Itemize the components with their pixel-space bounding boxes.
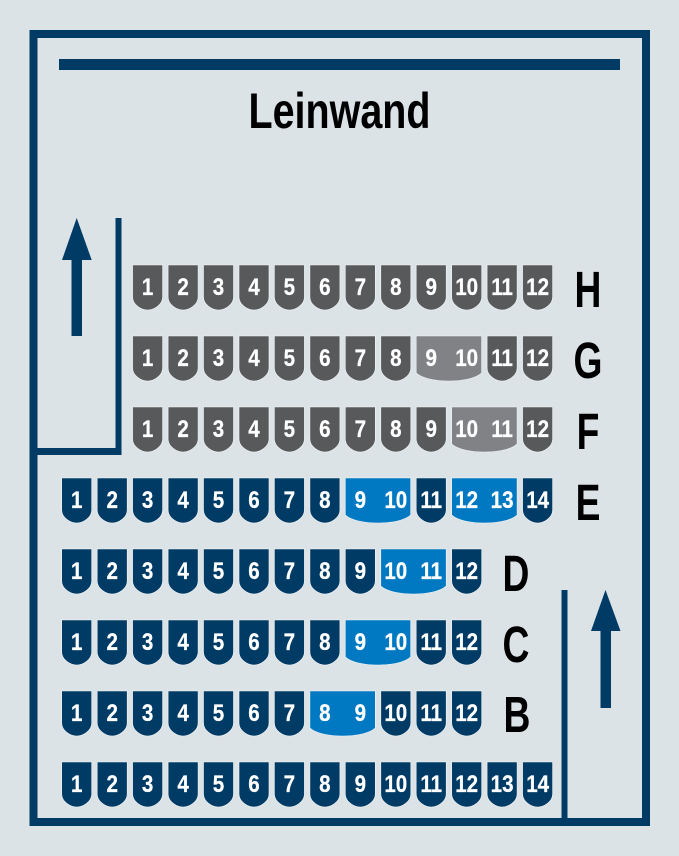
row H seats [133,265,553,310]
row H seats: 6 [319,273,331,300]
row A seats: 7 [284,770,295,797]
row E seats: 1 [71,486,82,513]
row G seats: 12 [526,344,549,371]
row C seats: 6 [248,628,260,655]
row C seats: 2 [106,628,118,655]
row E seats [62,478,553,523]
row F seats: 5 [284,415,295,442]
row H seats: 3 [213,273,224,300]
row D seats: 10 [384,557,407,584]
row B seats: 7 [284,699,295,726]
row H seats: 1 [142,273,153,300]
row D seats: 12 [455,557,478,584]
row label E: E [576,475,600,531]
row G seats: 2 [177,344,189,371]
row E seats: 8 [319,486,331,513]
row C seats: 4 [177,628,189,655]
row D seats: 11 [420,557,442,584]
row A seats: 13 [491,770,514,797]
row D seats: 8 [319,557,331,584]
row label F: F [577,404,599,460]
left aisle wall [37,218,122,455]
row E seats: 14 [526,486,549,513]
row A seats: 12 [455,770,478,797]
row A seats: 10 [384,770,407,797]
row F seats: 12 [526,415,549,442]
row A seats: 6 [248,770,260,797]
row C seats: 8 [319,628,331,655]
title: Leinwand [248,83,430,139]
row E seats: 12 [455,486,478,513]
row E seats: 10 [384,486,407,513]
row A seats: 9 [355,770,366,797]
row B seats: 8 [319,699,331,726]
row H seats: 8 [390,273,402,300]
row E seats: 7 [284,486,295,513]
row A seats: 3 [142,770,153,797]
row B seats: 3 [142,699,153,726]
row E seats: 11 [420,486,442,513]
row A seats: 1 [71,770,82,797]
row H seats: 4 [248,273,260,300]
row C seats: 1 [71,628,82,655]
row G seats: 11 [491,344,513,371]
row label B: B [504,687,530,743]
row A seats: 4 [177,770,189,797]
row C seats: 12 [455,628,478,655]
row H seats: 2 [177,273,189,300]
row B seats: 5 [213,699,224,726]
row C seats: 7 [284,628,295,655]
row B seats: 11 [420,699,442,726]
row D seats: 7 [284,557,295,584]
row C seats: 10 [384,628,407,655]
row A seats: 14 [526,770,549,797]
row E seats: 5 [213,486,224,513]
row A seats: 5 [213,770,224,797]
row A seats: 2 [106,770,118,797]
row C seats [62,620,482,665]
row F seats: 7 [355,415,366,442]
row D seats: 2 [106,557,118,584]
row label C: C [503,617,529,673]
row D seats [62,549,482,594]
row G seats: 8 [390,344,402,371]
row D seats: 5 [213,557,224,584]
row D seats: 1 [71,557,82,584]
row E seats: 3 [142,486,153,513]
row D seats: 6 [248,557,260,584]
row A seats: 8 [319,770,331,797]
arrow: left aisle up [62,218,92,336]
row C seats: 11 [420,628,442,655]
row label G: G [574,333,602,389]
row A seats: 11 [420,770,442,797]
row F seats: 8 [390,415,402,442]
row G seats: 5 [284,344,295,371]
row H seats: 10 [455,273,478,300]
row F seats: 1 [142,415,153,442]
row C seats: 5 [213,628,224,655]
row G seats: 4 [248,344,260,371]
row G seats [133,336,553,381]
row B seats [62,691,482,736]
row A seats [62,762,553,807]
row E seats: 4 [177,486,189,513]
row label D: D [503,546,529,602]
row F seats: 6 [319,415,331,442]
row H seats: 9 [425,273,437,300]
row G seats: 9 [425,344,437,371]
right aisle wall [562,590,568,820]
row D seats: 4 [177,557,189,584]
row F seats: 2 [177,415,189,442]
row B seats: 10 [384,699,407,726]
row F seats: 4 [248,415,260,442]
row D seats: 9 [355,557,366,584]
row D seats: 3 [142,557,153,584]
arrow: right aisle up [591,590,620,708]
row label H: H [575,262,601,318]
row B seats: 1 [71,699,82,726]
row F seats: 11 [491,415,513,442]
row F seats [133,407,553,452]
row F seats: 10 [455,415,478,442]
row E seats: 6 [248,486,260,513]
row E seats: 13 [491,486,514,513]
row C seats: 9 [355,628,366,655]
row B seats: 12 [455,699,478,726]
row B seats: 4 [177,699,189,726]
row H seats: 12 [526,273,549,300]
row B seats: 6 [248,699,260,726]
row G seats: 6 [319,344,331,371]
row H seats: 5 [284,273,295,300]
row E seats: 2 [106,486,118,513]
screen bar [59,59,620,70]
row E seats: 9 [355,486,366,513]
row B seats: 2 [106,699,118,726]
row C seats: 3 [142,628,153,655]
row B seats: 9 [355,699,366,726]
row G seats: 3 [213,344,224,371]
row F seats: 9 [425,415,437,442]
row G seats: 1 [142,344,153,371]
row G seats: 7 [355,344,366,371]
row H seats: 7 [355,273,366,300]
row F seats: 3 [213,415,224,442]
row H seats: 11 [491,273,513,300]
row G seats: 10 [455,344,478,371]
